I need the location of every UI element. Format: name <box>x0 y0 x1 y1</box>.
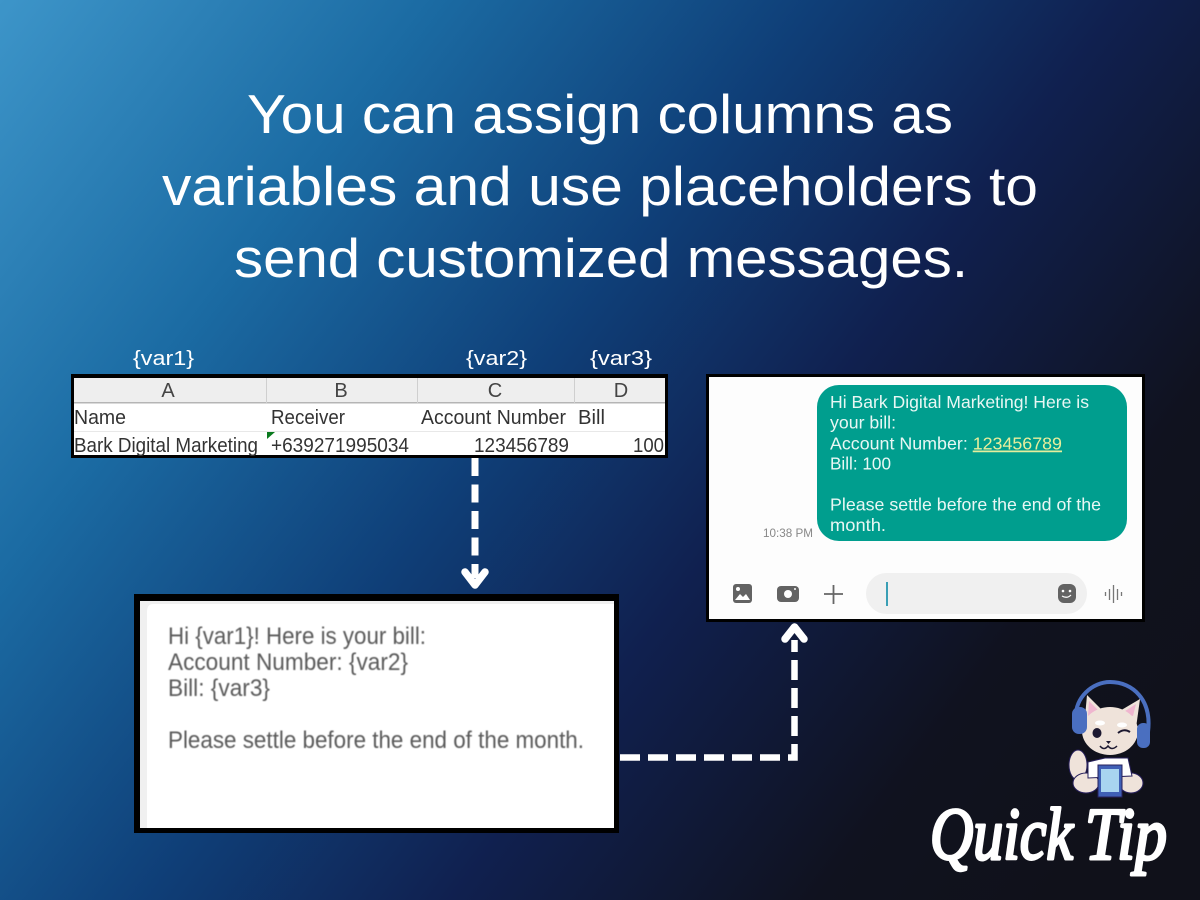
variable labels: {var3} <box>590 348 652 370</box>
template text: Hi {var1}! Here is your bill: <box>168 623 426 650</box>
variable labels <box>133 348 652 370</box>
title: You can assign columns as <box>247 83 953 145</box>
message bubble <box>817 385 1127 541</box>
template text: Please settle before the end of the month. <box>168 727 584 754</box>
column header row: A <box>161 380 175 402</box>
message template panel <box>134 594 619 833</box>
template text <box>168 623 584 754</box>
quick tip logo text: Tip <box>1085 794 1167 876</box>
bubble text: Bill: 100 <box>830 454 891 474</box>
spreadsheet panel <box>71 374 668 458</box>
spreadsheet cells: 123456789 <box>474 434 569 457</box>
variable labels: {var1} <box>133 348 194 370</box>
column header row: B <box>334 380 348 402</box>
icon: plus <box>824 585 843 604</box>
icon: cat mascot <box>1069 682 1150 797</box>
headphone band <box>1076 682 1149 732</box>
bubble text: Please settle before the end of the <box>830 494 1101 514</box>
template text: Bill: {var3} <box>168 675 270 702</box>
spreadsheet cells: +639271995034 <box>271 434 409 457</box>
bubble text: your bill: <box>830 412 896 432</box>
title: send customized messages. <box>234 227 968 289</box>
timestamp: 10:38 PM <box>763 526 813 540</box>
message input <box>866 573 1087 614</box>
bubble text: month. <box>830 515 886 535</box>
head <box>1082 707 1138 755</box>
spreadsheet cells: Bill <box>578 406 605 429</box>
spreadsheet cells: Receiver <box>271 406 345 429</box>
template text: Account Number: {var2} <box>168 649 408 676</box>
icon: sticker <box>1058 584 1076 603</box>
body and legs <box>1073 773 1099 793</box>
spreadsheet cells: 100 <box>633 434 664 457</box>
tail <box>1069 750 1087 780</box>
arrow: template to SMS <box>620 627 804 758</box>
title <box>162 83 1038 289</box>
bubble text: Account Number: 123456789 <box>830 434 1062 454</box>
headphone cups <box>1072 707 1087 734</box>
icon: camera <box>777 586 799 602</box>
icon: voice <box>1106 585 1122 603</box>
bubble text: Hi Bark Digital Marketing! Here is <box>830 392 1089 412</box>
column header row <box>74 378 665 432</box>
arrow: spreadsheet to template <box>465 458 485 585</box>
quick tip logo text: Quick <box>930 794 1074 876</box>
tablet <box>1098 765 1122 797</box>
icon: gallery <box>733 584 752 603</box>
face <box>1092 728 1102 738</box>
title: variables and use placeholders to <box>162 155 1038 217</box>
spreadsheet cells: Name <box>74 406 126 429</box>
bubble text <box>830 392 1101 535</box>
column header row: D <box>614 380 628 402</box>
spreadsheet cells: Account Number <box>421 406 566 429</box>
ears <box>1084 695 1104 728</box>
SMS screenshot panel <box>706 374 1145 622</box>
variable labels: {var2} <box>466 348 527 370</box>
spreadsheet cells: Bark Digital Marketing <box>74 434 258 457</box>
spreadsheet cells <box>74 406 664 457</box>
column header row: C <box>488 380 502 402</box>
